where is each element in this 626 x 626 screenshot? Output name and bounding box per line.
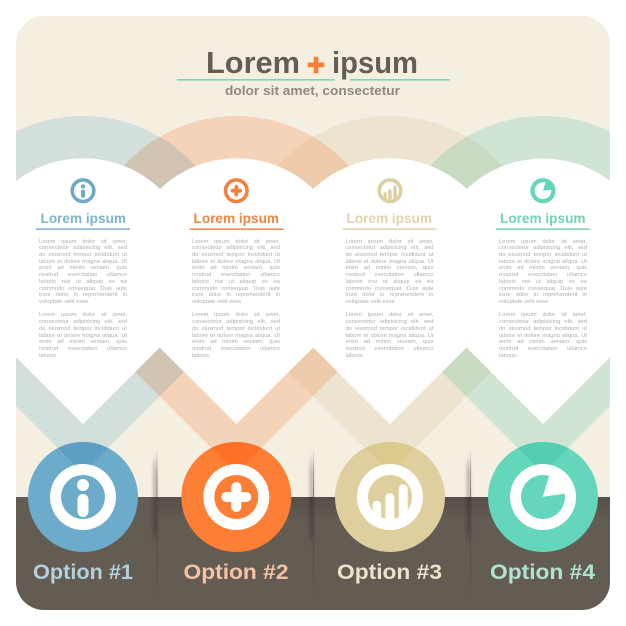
title: ipsum bbox=[332, 45, 418, 80]
text block: column 2: voluptate velit esse bbox=[192, 299, 241, 305]
text block: column 1 bbox=[39, 238, 127, 359]
text block: column 1: commodo consequat. Duis aute bbox=[39, 286, 127, 292]
text block: column 1: Lorem ipsum dolor sit amet, bbox=[39, 312, 127, 318]
text block: column 2: consectetur adipisicing elit, sed bbox=[192, 245, 280, 251]
overlapping arc bands bbox=[16, 116, 610, 189]
text block: column 3: labore et dolore magna aliqua. Ut bbox=[346, 333, 434, 339]
subtitle: dolor sit amet, consectetur bbox=[225, 83, 400, 98]
text block: column 4: labore et dolore magna aliqua. Ut bbox=[499, 259, 587, 265]
icon: small plus bbox=[224, 178, 249, 203]
text block: column 3: Lorem ipsum dolor sit amet, bbox=[346, 312, 434, 318]
text block: column 3: nostrud exercitation ullamco bbox=[346, 346, 434, 352]
text block: column 4: commodo consequat. Duis aute bbox=[499, 286, 587, 292]
text block: column 3: laboris nisi ut aliquip ex ea bbox=[346, 279, 434, 285]
text block: column 3: laboris. bbox=[346, 353, 364, 359]
text block: column 1: enim ad minim veniam, quis bbox=[39, 339, 127, 345]
text block: column 4: consectetur adipisicing elit, sed bbox=[499, 319, 587, 325]
title: + bbox=[307, 49, 325, 82]
text block: column 4: do eiusmod tempor incididunt ut bbox=[499, 326, 587, 332]
text block: column 1: do eiusmod tempor incididunt ut bbox=[39, 252, 127, 258]
text block: column 2: labore et dolore magna aliqua. Ut bbox=[192, 259, 280, 265]
text block: column 4: laboris nisi ut aliquip ex ea bbox=[499, 279, 587, 285]
text block: column 2: Lorem ipsum dolor sit amet, bbox=[192, 238, 280, 244]
text block: column 4: do eiusmod tempor incididunt ut bbox=[499, 252, 587, 258]
text block: column 3: commodo consequat. Duis aute bbox=[346, 286, 434, 292]
text block: column 2: consectetur adipisicing elit, sed bbox=[192, 319, 280, 325]
text block: column 4: enim ad minim veniam, quis bbox=[499, 339, 587, 345]
text block: column 2: nostrud exercitation ullamco bbox=[192, 346, 280, 352]
text block: column 1: nostrud exercitation ullamco bbox=[39, 272, 127, 278]
label: option 3: Option #3 bbox=[337, 561, 442, 584]
text block: column 1: voluptate velit esse bbox=[39, 299, 88, 305]
text block: column 1: consectetur adipisicing elit, sed bbox=[39, 245, 127, 251]
text block: column 2: commodo consequat. Duis aute bbox=[192, 286, 280, 292]
title bbox=[177, 45, 450, 82]
icon: large chart badge bbox=[335, 442, 445, 552]
text block: column 3: labore et dolore magna aliqua. Ut bbox=[346, 259, 434, 265]
text block: column 4: laboris. bbox=[499, 353, 518, 359]
label: option 2: Option #2 bbox=[184, 561, 288, 584]
text block: column 2: nostrud exercitation ullamco bbox=[192, 272, 280, 278]
text block: column 2: do eiusmod tempor incididunt ut bbox=[192, 252, 280, 258]
text block: column 2: enim ad minim veniam, quis bbox=[192, 265, 280, 271]
zigzag chevron bands bbox=[16, 348, 610, 448]
text block: column 1: irure dolor in reprehenderit in bbox=[39, 292, 127, 298]
text block: column 1: labore et dolore magna aliqua. Ut bbox=[39, 333, 127, 339]
text block: column 4: voluptate velit esse bbox=[499, 299, 548, 305]
text block: column 1: Lorem ipsum dolor sit amet, bbox=[39, 238, 127, 244]
text block: column 3: irure dolor in reprehenderit in bbox=[346, 292, 434, 298]
heading: column 3: Lorem ipsum bbox=[346, 210, 432, 226]
icon: small pie bbox=[530, 178, 556, 203]
heading: column 2: Lorem ipsum bbox=[194, 210, 279, 226]
footer band bbox=[16, 497, 610, 610]
text block: column 3: consectetur adipisicing elit, sed bbox=[346, 245, 434, 251]
label: option 1: Option #1 bbox=[33, 561, 133, 584]
text block: column 3: do eiusmod tempor incididunt ut bbox=[346, 326, 434, 332]
text block: column 3: consectetur adipisicing elit, sed bbox=[346, 319, 434, 325]
text block: column 3: Lorem ipsum dolor sit amet, bbox=[346, 238, 434, 244]
text block: column 2: laboris nisi ut aliquip ex ea bbox=[192, 279, 280, 285]
text block: column 1: enim ad minim veniam, quis bbox=[39, 265, 127, 271]
icon: large plus badge bbox=[181, 442, 292, 552]
text block: column 3 bbox=[346, 238, 434, 359]
text block: column 4: enim ad minim veniam, quis bbox=[499, 265, 587, 271]
text block: column 1: labore et dolore magna aliqua. Ut bbox=[39, 259, 127, 265]
icon: small info bbox=[70, 178, 96, 203]
heading: column 1: Lorem ipsum bbox=[40, 210, 126, 226]
icon: large pie badge bbox=[488, 442, 598, 552]
text block: column 2: laboris. bbox=[192, 353, 211, 359]
text block: column 2: do eiusmod tempor incididunt ut bbox=[192, 326, 280, 332]
icon: large info badge bbox=[28, 442, 138, 552]
text block: column 2: enim ad minim veniam, quis bbox=[192, 339, 280, 345]
label: option 4: Option #4 bbox=[490, 561, 595, 584]
text block: column 1: laboris. bbox=[39, 353, 58, 359]
text block: column 3: voluptate velit esse bbox=[346, 299, 395, 305]
text block: column 2 bbox=[192, 238, 280, 359]
icon: small chart bbox=[377, 178, 403, 203]
text block: column 3: enim ad minim veniam, quis bbox=[346, 265, 434, 271]
text block: column 4: nostrud exercitation ullamco bbox=[499, 346, 587, 352]
text block: column 4: Lorem ipsum dolor sit amet, bbox=[499, 312, 587, 318]
text block: column 2: labore et dolore magna aliqua. Ut bbox=[192, 333, 280, 339]
text block: column 3: nostrud exercitation ullamco bbox=[346, 272, 434, 278]
text block: column 1: nostrud exercitation ullamco bbox=[39, 346, 127, 352]
heading: column 4: Lorem ipsum bbox=[500, 210, 586, 226]
white scalloped content panel bbox=[16, 158, 610, 424]
text block: column 1: consectetur adipisicing elit, sed bbox=[39, 319, 127, 325]
text block: column 4: Lorem ipsum dolor sit amet, bbox=[499, 238, 587, 244]
text block: column 3: enim ad minim veniam, quis bbox=[346, 339, 434, 345]
text block: column 1: laboris nisi ut aliquip ex ea bbox=[39, 279, 127, 285]
text block: column 4: labore et dolore magna aliqua. Ut bbox=[499, 333, 587, 339]
text block: column 3: do eiusmod tempor incididunt ut bbox=[346, 252, 434, 258]
text block: column 4: irure dolor in reprehenderit in bbox=[499, 292, 587, 298]
text block: column 1: do eiusmod tempor incididunt ut bbox=[39, 326, 127, 332]
text block: column 2: Lorem ipsum dolor sit amet, bbox=[192, 312, 280, 318]
text block: column 4 bbox=[499, 238, 587, 359]
title: Lorem bbox=[206, 45, 300, 80]
text block: column 4: consectetur adipisicing elit, sed bbox=[499, 245, 587, 251]
text block: column 2: irure dolor in reprehenderit in bbox=[192, 292, 280, 298]
text block: column 4: nostrud exercitation ullamco bbox=[499, 272, 587, 278]
column dividers bbox=[152, 449, 472, 580]
